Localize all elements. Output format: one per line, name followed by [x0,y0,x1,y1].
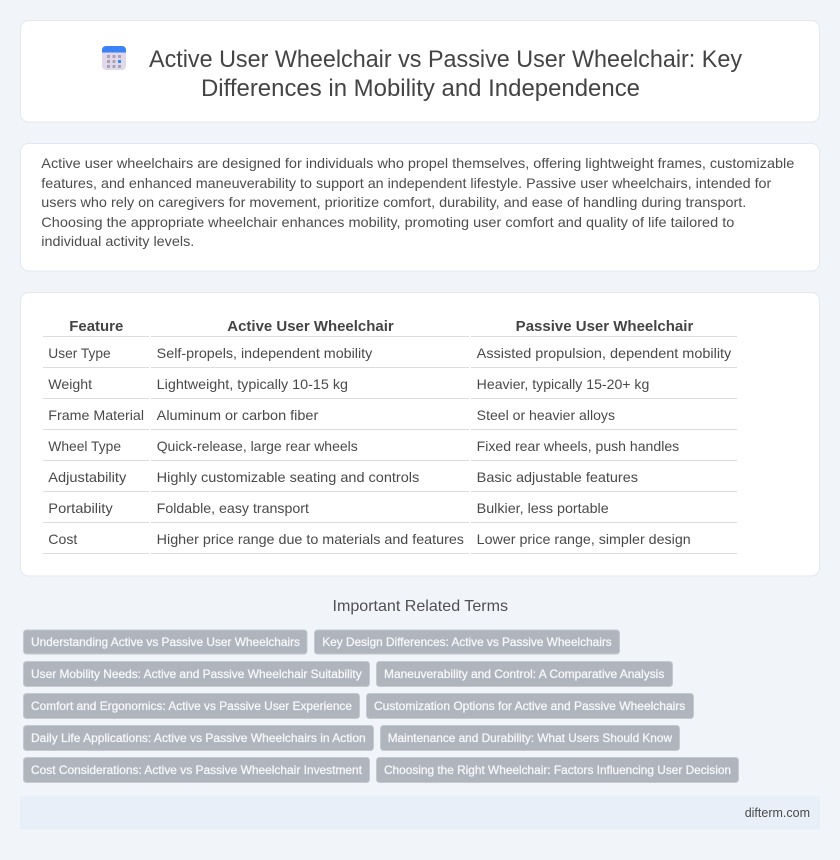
panel: intro paragraph [20,144,820,271]
tag: User Mobility Needs: Active and Passive Wheelchair Suitability [31,667,362,681]
table row: adjustability [43,469,737,492]
table row: user type: User Type [48,345,111,361]
text block: intro: Active user wheelchairs are designed for individuals who propel themselves, offering lightweight frames, customizable [41,155,795,171]
tag: Choosing the Right Wheelchair: Factors Influencing User Decision [384,763,731,777]
table header row: Passive User Wheelchair [516,319,694,335]
tag: Understanding Active vs Passive User Wheelchairs [31,635,300,649]
table row: wheel type: Fixed rear wheels, push handles [477,438,679,454]
table header row [43,319,737,337]
table row: user type [43,345,737,368]
tag: Maneuverability and Control: A Comparative Analysis [384,667,664,681]
tag [376,662,672,686]
tag [380,726,680,750]
title: Active User Wheelchair vs Passive User Wheelchair: Key [149,46,742,73]
tag [314,630,620,654]
table row: portability: Bulkier, less portable [477,500,609,516]
tag: Comfort and Ergonomics: Active vs Passive User Experience [31,699,352,713]
tag [24,726,374,750]
table row: wheel type: Quick-release, large rear wheels [157,438,358,454]
footer source text: difterm.com [745,805,810,820]
table row: cost: Higher price range due to materials and features [157,531,464,547]
table row: adjustability: Basic adjustable features [477,469,638,485]
table row: user type: Self-propels, independent mobility [157,345,372,361]
tag: Cost Considerations: Active vs Passive Wheelchair Investment [31,763,363,777]
table row: cost [43,531,737,554]
table row: wheel type [43,438,737,461]
table row: frame material [43,407,737,430]
table row: portability: Foldable, easy transport [157,500,309,516]
tag: Key Design Differences: Active vs Passive Wheelchairs [322,635,612,649]
tag [24,630,307,654]
table row: weight [43,376,737,399]
tag [366,694,694,718]
title: Differences in Mobility and Independence [201,75,640,102]
table row: wheel type: Wheel Type [48,438,121,454]
tag [24,758,370,782]
text block: intro: features, and enhanced maneuverability to support an independent lifestyle. Passive user wheelchairs, intended for [41,175,772,191]
table row: frame material: Frame Material [48,407,144,423]
table row: cost: Cost [48,531,77,547]
table row: weight: Weight [48,376,92,392]
icon: calendar [102,46,126,70]
tag: Customization Options for Active and Passive Wheelchairs [374,699,685,713]
table row: cost: Lower price range, simpler design [477,531,691,547]
table row: portability: Portability [48,500,113,516]
text block: intro: individual activity levels. [41,233,194,249]
table header row: Feature [69,319,123,335]
title [149,46,742,102]
text block: intro: Choosing the appropriate wheelchair enhances mobility, promoting user comfort and quality of life tailored to [41,214,735,230]
tag: Maintenance and Durability: What Users Should Know [388,731,672,745]
table row: weight: Lightweight, typically 10-15 kg [157,376,348,392]
table row: frame material: Steel or heavier alloys [477,407,615,423]
table row: weight: Heavier, typically 15-20+ kg [477,376,649,392]
table row: adjustability: Highly customizable seating and controls [157,469,419,485]
heading: important related terms: Important Related Terms [332,598,508,615]
text block: intro [41,155,795,249]
tag [376,758,738,782]
tag cloud: related terms [24,630,738,782]
table row: adjustability: Adjustability [48,469,126,485]
panel: comparison table [20,292,820,576]
footer [20,796,820,830]
tag [24,662,370,686]
table row: portability [43,500,737,523]
panel: title header [20,20,820,122]
table row: user type: Assisted propulsion, dependent mobility [477,345,731,361]
tag: Daily Life Applications: Active vs Passive Wheelchairs in Action [31,731,366,745]
tag [24,694,360,718]
table row: frame material: Aluminum or carbon fiber [157,407,319,423]
text block: intro: users who rely on caregivers for movement, prioritize comfort, durability, and ease of handling during transport. [41,194,746,210]
table header row: Active User Wheelchair [227,319,394,335]
